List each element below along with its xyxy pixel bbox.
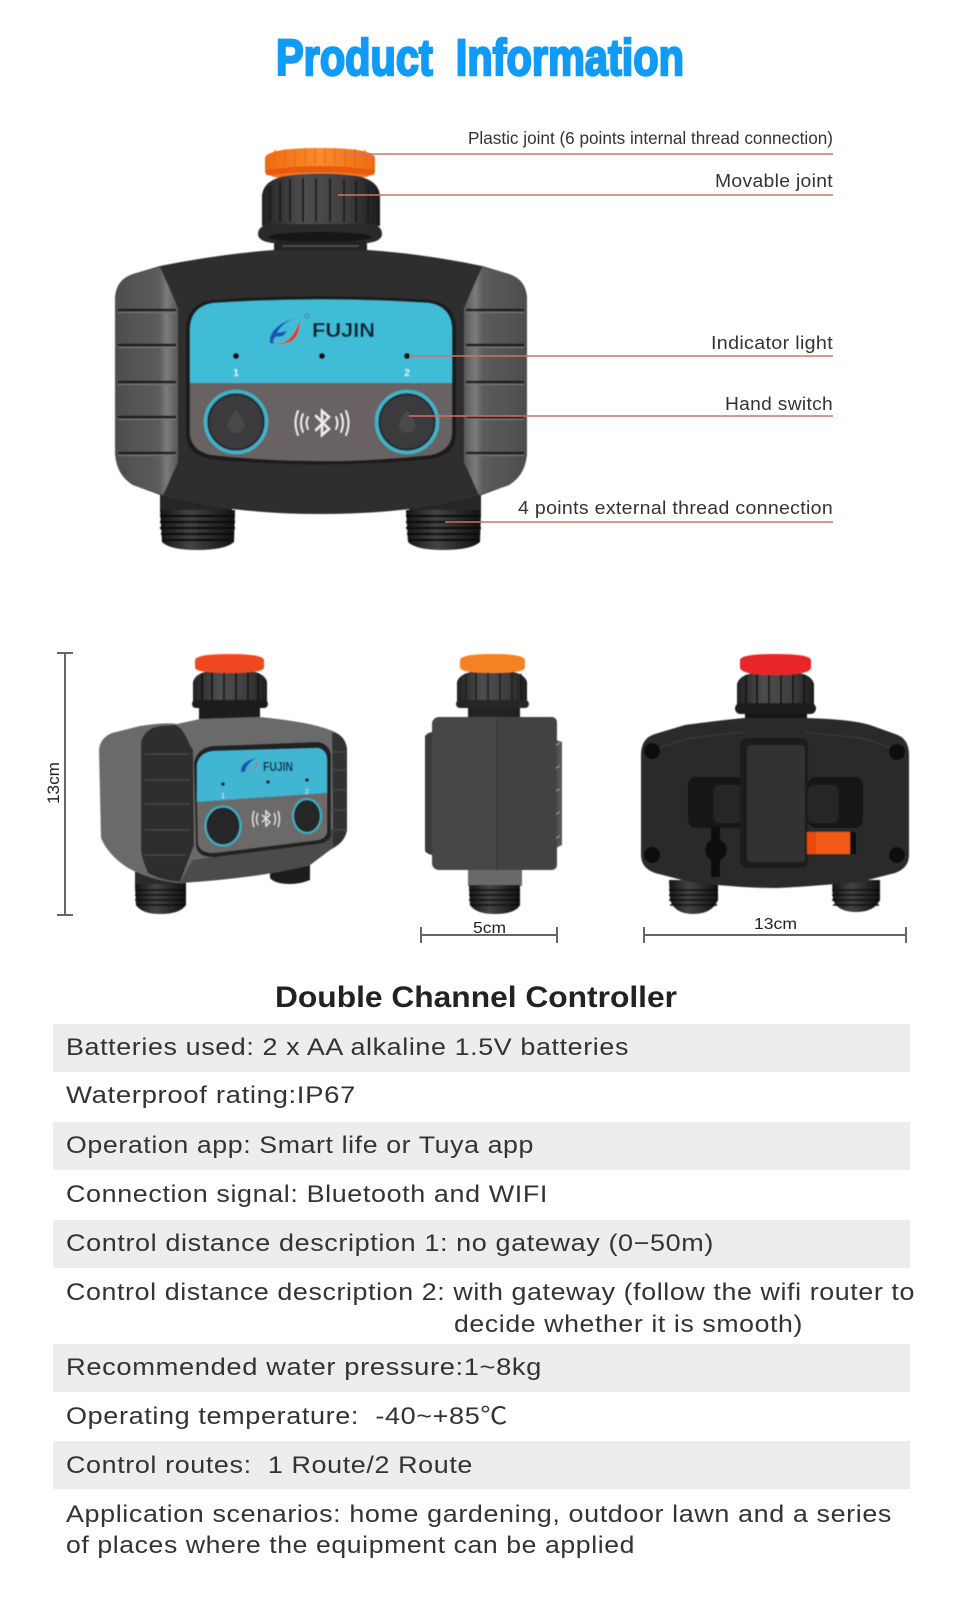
hand switches bbox=[206, 806, 240, 846]
icon: top connector bbox=[456, 654, 529, 720]
logo: FUJIN bbox=[263, 759, 293, 774]
row: control distance 2: decide whether it is smooth) bbox=[454, 1311, 803, 1338]
row: water pressure: Recommended water pressure:1~8kg bbox=[66, 1354, 542, 1381]
left grip panel bbox=[115, 267, 178, 495]
icon: bluetooth signal bbox=[296, 411, 348, 435]
specification table bbox=[53, 1024, 915, 1559]
dimension: height 13cm bbox=[44, 653, 73, 915]
callout: external thread: 4 points external thread connection bbox=[518, 498, 833, 518]
icon: back outlet bbox=[270, 860, 310, 884]
mounting holes bbox=[644, 743, 660, 759]
row: batteries bbox=[53, 1024, 910, 1072]
icon: outlets bbox=[669, 880, 880, 914]
hand switch left bbox=[206, 392, 266, 452]
row: control distance 2 bbox=[66, 1279, 915, 1338]
icon: front outlet bbox=[135, 868, 186, 914]
callout: hand switch: Hand switch bbox=[725, 394, 833, 414]
icon: movable joint nut bbox=[258, 174, 382, 254]
callout: plastic joint: Plastic joint (6 points internal thread connection) bbox=[468, 128, 833, 148]
control panel bbox=[194, 742, 331, 857]
row: operation app: Operation app: Smart life or Tuya app bbox=[66, 1132, 534, 1159]
row: control routes: Control routes: 1 Route/2 Route bbox=[66, 1452, 473, 1479]
center plate bbox=[740, 738, 808, 868]
control panel: 2 bbox=[404, 368, 410, 379]
callout: indicator light: Indicator light bbox=[711, 333, 833, 353]
main product: front view of controller bbox=[115, 148, 527, 550]
hand switch right bbox=[376, 392, 438, 452]
icon: top connector bbox=[735, 654, 816, 722]
dimension: height 13cm: 13cm bbox=[44, 762, 63, 804]
dimension: width 5cm bbox=[421, 920, 557, 943]
row: operation app bbox=[53, 1122, 910, 1170]
row: control distance 1: Control distance description 1: no gateway (0−50m) bbox=[66, 1230, 714, 1257]
icon: orange plastic joint bbox=[265, 148, 375, 180]
icon: bottom connector bbox=[468, 867, 522, 914]
control panel: 2 bbox=[305, 789, 309, 796]
dimension: width 13cm: 13cm bbox=[754, 916, 797, 933]
row: waterproof: Waterproof rating:IP67 bbox=[66, 1082, 356, 1109]
callout: movable joint: Movable joint bbox=[715, 171, 833, 191]
control panel: 1 bbox=[221, 793, 225, 800]
control panel bbox=[186, 296, 456, 464]
row: operating temperature: Operating temperature: -40~+85℃ bbox=[66, 1403, 508, 1430]
icon: orange tab bbox=[807, 832, 856, 854]
logo bbox=[270, 314, 375, 344]
dimension: width 13cm bbox=[644, 916, 906, 943]
heading: double channel controller: Double Channel Controller bbox=[275, 981, 677, 1014]
icon: threaded outlet right bbox=[406, 492, 481, 550]
product view: three-quarter bbox=[99, 654, 347, 914]
body bbox=[641, 718, 909, 888]
icon: threaded outlet left bbox=[160, 492, 235, 550]
control panel: 1 bbox=[233, 368, 239, 379]
row: control distance 1 bbox=[53, 1220, 910, 1268]
row: connection signal: Connection signal: Bluetooth and WIFI bbox=[66, 1181, 548, 1208]
product view: side bbox=[425, 654, 562, 914]
icon: rubber plug bbox=[705, 827, 727, 877]
row: application scenarios: of places where the equipment can be applied bbox=[66, 1532, 635, 1559]
icon: top connector bbox=[192, 654, 268, 722]
row: application scenarios: Application scenarios: home gardening, outdoor lawn and a series bbox=[66, 1501, 892, 1528]
recesses bbox=[688, 777, 744, 828]
row: batteries: Batteries used: 2 x AA alkaline 1.5V batteries bbox=[66, 1034, 629, 1061]
icon: bluetooth signal bbox=[252, 811, 280, 827]
dimension: width 5cm: 5cm bbox=[473, 920, 506, 937]
body bbox=[99, 717, 347, 883]
body bbox=[425, 732, 432, 855]
product view: back bbox=[641, 654, 909, 914]
logo: FUJIN bbox=[312, 320, 375, 342]
title: Product Information bbox=[276, 29, 684, 86]
right grip panel bbox=[464, 267, 527, 495]
indicator lights bbox=[233, 353, 239, 359]
controller body bbox=[115, 250, 527, 514]
row: water pressure bbox=[53, 1344, 910, 1392]
row: application scenarios bbox=[66, 1501, 892, 1559]
row: control distance 2: Control distance description 2: with gateway (follow the wifi router to bbox=[66, 1279, 915, 1306]
row: control routes bbox=[53, 1441, 910, 1489]
